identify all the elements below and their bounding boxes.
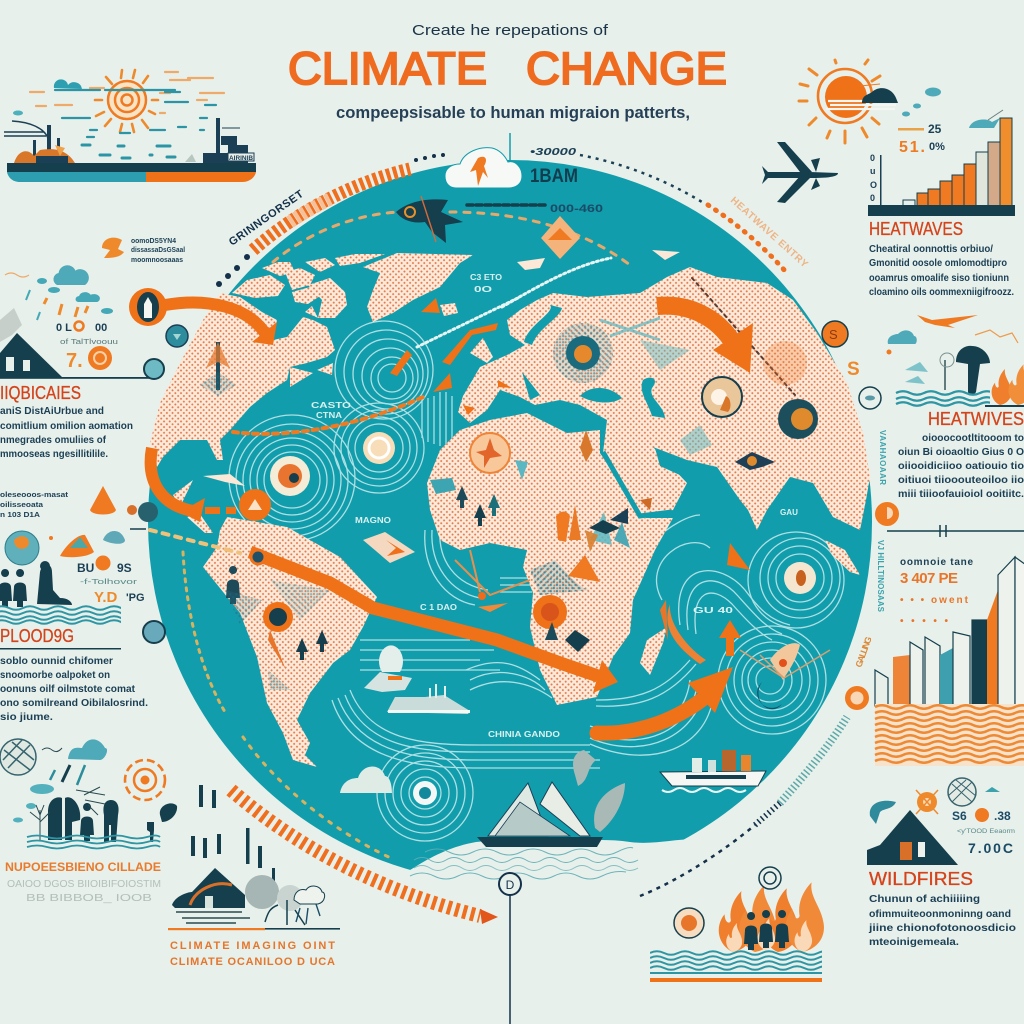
cloud marker at globe top: [445, 133, 522, 188]
panel: right top heatwaves chart: [762, 60, 1015, 298]
icon: orange flower: [916, 790, 938, 814]
heading: PLOOD9G: [0, 626, 74, 646]
top labels near globe: •30000: [530, 147, 577, 158]
paragraph: [869, 243, 1014, 298]
paragraph: Gmonitid oosole omlomodtipro: [869, 257, 1007, 269]
paragraph: ono somilreand Oibilalosrind.: [0, 697, 148, 709]
paragraph: [0, 655, 148, 723]
heading: IIQBICAIES: [0, 383, 81, 403]
ocean labels: 0O: [474, 285, 492, 294]
icon: orange leaf: [102, 238, 124, 258]
bar chart: [868, 118, 1015, 216]
mini statistics: 0%: [929, 141, 945, 153]
small caption: [0, 492, 69, 519]
paragraph: [898, 432, 1024, 500]
arrow: South America to Africa: [250, 552, 618, 693]
top labels near globe: 1BAM: [530, 166, 578, 187]
icon: badges: [127, 502, 165, 643]
paragraph: oiiooidiciioo oatiouio tio: [898, 460, 1024, 472]
paragraph: aniS DistAiUrbue and: [0, 405, 104, 417]
faint caption: OAIOO DGOS BIIOIBIFOIOSTIM: [7, 879, 161, 890]
side badges: S: [829, 327, 838, 342]
waves: [896, 390, 990, 407]
small dark figures: [191, 785, 275, 884]
small caption: oilisseoata: [0, 502, 43, 509]
mini statistics: of TalTlvoouu: [60, 339, 118, 346]
bar chart: u: [870, 166, 876, 176]
paragraph: sio jiume.: [0, 711, 53, 723]
paragraph: jiine chionofotonoosdicio: [868, 922, 1016, 934]
paragraph: oiun Bi oioaoltio Gius 0 O: [898, 446, 1024, 458]
trees and rain: [30, 787, 105, 840]
caption lines: [170, 940, 335, 968]
mini statistics: BU: [77, 561, 94, 575]
statistics: [900, 557, 973, 627]
icon: teal badge: [166, 325, 188, 347]
panel: top-left industry ship: [4, 70, 256, 182]
mini statistics: [56, 322, 118, 372]
paragraph: [0, 405, 133, 460]
heading: WILDFIRES: [869, 869, 973, 889]
landmass: Madagascar and islands: [640, 540, 860, 675]
landmass: Africa: [427, 413, 673, 705]
side badges: S: [847, 359, 860, 380]
icon: orange circle with figure and arrow origin: [129, 288, 167, 326]
icon: orange drop: [90, 486, 116, 514]
arrow: Eurasia: [657, 306, 753, 373]
icon: hut: [172, 868, 250, 923]
arrow: to North America: [165, 303, 277, 345]
paragraph: miii tiiioofauioiol ooitiitc.: [898, 488, 1024, 500]
ocean labels: C3 ETO: [470, 273, 502, 282]
mini statistics: 'PG: [126, 592, 145, 604]
paragraph: oiooocootltitooom to: [922, 432, 1024, 444]
heading: HEATWAVES: [869, 219, 963, 239]
side badges: VAAHAOAAR: [878, 430, 887, 485]
mini statistics: S6: [952, 809, 967, 823]
waves: [27, 836, 160, 848]
paragraph: oonuns oilf oilmstote comat: [0, 683, 135, 695]
mini statistics: [898, 122, 945, 156]
statistics: • • • owent: [900, 595, 969, 606]
arrow: Indian Ocean: [597, 667, 733, 733]
ships and clouds in ocean: [340, 645, 766, 793]
mini statistics: -f-Tolhovor: [80, 579, 138, 586]
hull: [7, 163, 256, 182]
landmass: Eurasia: [458, 250, 870, 530]
icon: house on mountain: [0, 308, 164, 379]
paragraph: mteoinigemeala.: [869, 936, 959, 948]
top labels near globe: 000-460: [550, 203, 603, 215]
faint caption: BB BIBBOB_ IOOB: [26, 893, 152, 904]
bar chart: 0: [870, 193, 875, 203]
dashed migration routes: [150, 205, 795, 860]
factory: [4, 121, 75, 163]
small caption: n 103 D1A: [0, 512, 40, 519]
small caption: dissassaDsGSaal: [131, 247, 185, 254]
mini statistics: 25: [928, 122, 942, 136]
statistics: • • • • •: [900, 616, 948, 627]
paragraph: nmegrades omuliies of: [0, 434, 106, 446]
ocean labels: MAGNO: [355, 516, 391, 525]
icon: sun: [95, 70, 158, 132]
panel: lower left climate people: [0, 739, 177, 904]
mini statistics: [952, 808, 1015, 856]
title block: Create he repepations of: [412, 22, 609, 39]
arrow: Gulf loop: [151, 448, 236, 522]
ocean labels: C 1 DAO: [420, 603, 457, 612]
icon: sun with cloud: [799, 60, 898, 143]
side badges: [822, 321, 899, 526]
icon: grid globe: [0, 739, 36, 775]
people: [48, 797, 177, 842]
icon: cloud: [888, 330, 917, 344]
paragraph: Chunun of achiiiiing: [869, 893, 980, 905]
landmass: North America: [150, 254, 385, 533]
paragraph: oitiuoi tiiooouteoiloo iio: [898, 474, 1024, 486]
skyline: [875, 557, 1024, 706]
statistics: oomnoie tane: [900, 557, 973, 568]
inland seas: [522, 305, 690, 476]
ocean labels: GAU: [780, 508, 798, 517]
bar chart: 0: [870, 153, 875, 163]
red sea: [603, 452, 672, 516]
icon: cloud with rain: [13, 739, 107, 822]
paragraph: comitlium omilion aomation: [0, 420, 133, 432]
bar chart: O: [870, 180, 877, 190]
mini statistics: 0 L: [56, 322, 72, 334]
mini statistics: 51.: [899, 139, 925, 156]
sailing ship: [477, 750, 625, 847]
arc label upper right: HEATWAVE ENTRY: [728, 195, 810, 270]
flames: [719, 882, 824, 952]
panel: left floods: [0, 486, 166, 722]
paragraph: snoomorbe oalpoket on: [0, 669, 110, 681]
landmass: Greenland: [363, 253, 473, 322]
map pictograms: trees and figures: [200, 318, 830, 709]
title block: CHANGE: [526, 43, 727, 94]
scattered climate dashes: [30, 72, 224, 158]
rotated label: GALLING: [853, 635, 874, 669]
ocean labels: [311, 273, 798, 739]
icon: small globe and cap: [5, 531, 125, 565]
map markers: [239, 323, 818, 632]
caption lines: CLIMATE OCANILOO D UCA: [170, 956, 335, 968]
people on flood waves: [0, 561, 72, 607]
small caption: [131, 238, 185, 264]
ocean current ripples: [229, 321, 844, 841]
bottom centre marker: D: [506, 878, 515, 892]
icon: orange plane: [917, 315, 978, 328]
orange banner heading: NUPOEESBIENO CILLADE: [5, 860, 161, 874]
title block: CLIMATE: [288, 43, 487, 94]
panel: right wildfires: [867, 778, 1016, 948]
ship superstructure: [185, 118, 254, 163]
arrow: small north Indian Ocean arrows: [719, 543, 750, 656]
paragraph: Cheatiral oonnottis orbiuo/: [869, 243, 993, 255]
icon: target sun: [125, 760, 165, 800]
small caption: oleseooos-masat: [0, 492, 69, 499]
title block: [288, 22, 727, 122]
paragraph: ooamrus omoalife siso tioniunn: [869, 272, 1009, 284]
statistics: 3 407 PE: [900, 570, 958, 587]
small caption: moomnoosaaas: [131, 257, 183, 264]
caption lines: CLIMATE IMAGING OINT: [170, 940, 335, 952]
striped arc: lower left: [231, 790, 498, 924]
bottom wave zone of globe: [383, 838, 712, 900]
orange wave field: [875, 704, 1024, 766]
waves: [0, 605, 121, 625]
mini statistics: Y.D: [94, 589, 118, 606]
small caption: oomoDS5YN4: [131, 238, 176, 245]
top labels near globe: [530, 147, 603, 215]
baseline: [168, 928, 340, 930]
mini statistics: <y'TOOD Eeaorm: [957, 829, 1015, 835]
ocean labels: CASTO: [311, 401, 351, 410]
mini statistics: 7.00C: [968, 840, 1013, 856]
icon: dark rocket fish: [396, 196, 463, 243]
paragraph: soblo ounnid chifomer: [0, 655, 113, 667]
panel: right city and sea: [845, 525, 1024, 766]
faint caption: [7, 879, 161, 904]
icon: teal clouds: [902, 88, 1003, 128]
people in fire: [744, 910, 789, 950]
flames: [992, 364, 1024, 405]
mini statistics: 00: [95, 322, 107, 334]
bottom centre marker: [499, 873, 521, 1024]
panel: left hurricanes: [0, 238, 188, 460]
dotted arc: upper right: [580, 155, 786, 272]
paragraph: mmooseas ngesillitilile.: [0, 448, 108, 460]
icon: house: [867, 810, 958, 865]
ocean labels: CTNA: [316, 411, 342, 420]
mini statistics: 9S: [117, 561, 132, 575]
mini statistics: [77, 556, 145, 606]
dashed arc: lower right: [640, 717, 847, 896]
icon: dark plane: [762, 142, 838, 203]
striped arc: upper left: [216, 153, 445, 287]
icon: small teal creature: [870, 801, 896, 824]
title block: compeepsisable to human migraion patterts,: [336, 103, 690, 122]
figures and tree: [905, 346, 990, 394]
paragraph: ofimmuiteoonmoninng oand: [869, 908, 1011, 920]
arc label upper left: GRINNGORSET: [227, 188, 306, 248]
panel: bottom centre village: [168, 785, 340, 968]
ripple eye: [413, 781, 437, 805]
paragraph: [868, 893, 1016, 948]
panel: right heatwaves scene: [822, 315, 1024, 526]
mini statistics: .38: [994, 809, 1011, 823]
trees and cloud: [245, 875, 325, 925]
arrow: Atlantic orange shards: [390, 298, 512, 415]
ocean labels: CHINIA GANDO: [488, 730, 560, 739]
icon: grid globe: [948, 778, 976, 806]
panel: bottom wildfire scene: [650, 866, 824, 982]
icon: ringed badges: [674, 867, 781, 938]
ship superstructure: AIRINIB: [229, 156, 254, 162]
vertical teal label: VJ HILLTINOSAAS: [876, 540, 885, 613]
landmass: South America: [203, 517, 377, 767]
orange ocean wedge icon: [363, 532, 415, 563]
waves: [650, 951, 846, 973]
ocean labels: GU 40: [693, 606, 734, 615]
icon: cloud and rain: [5, 265, 113, 320]
mini statistics: 7.: [66, 350, 83, 372]
icon: diamond marker: [541, 216, 580, 259]
divider line: [887, 525, 1024, 537]
icon: badge: [845, 686, 869, 710]
